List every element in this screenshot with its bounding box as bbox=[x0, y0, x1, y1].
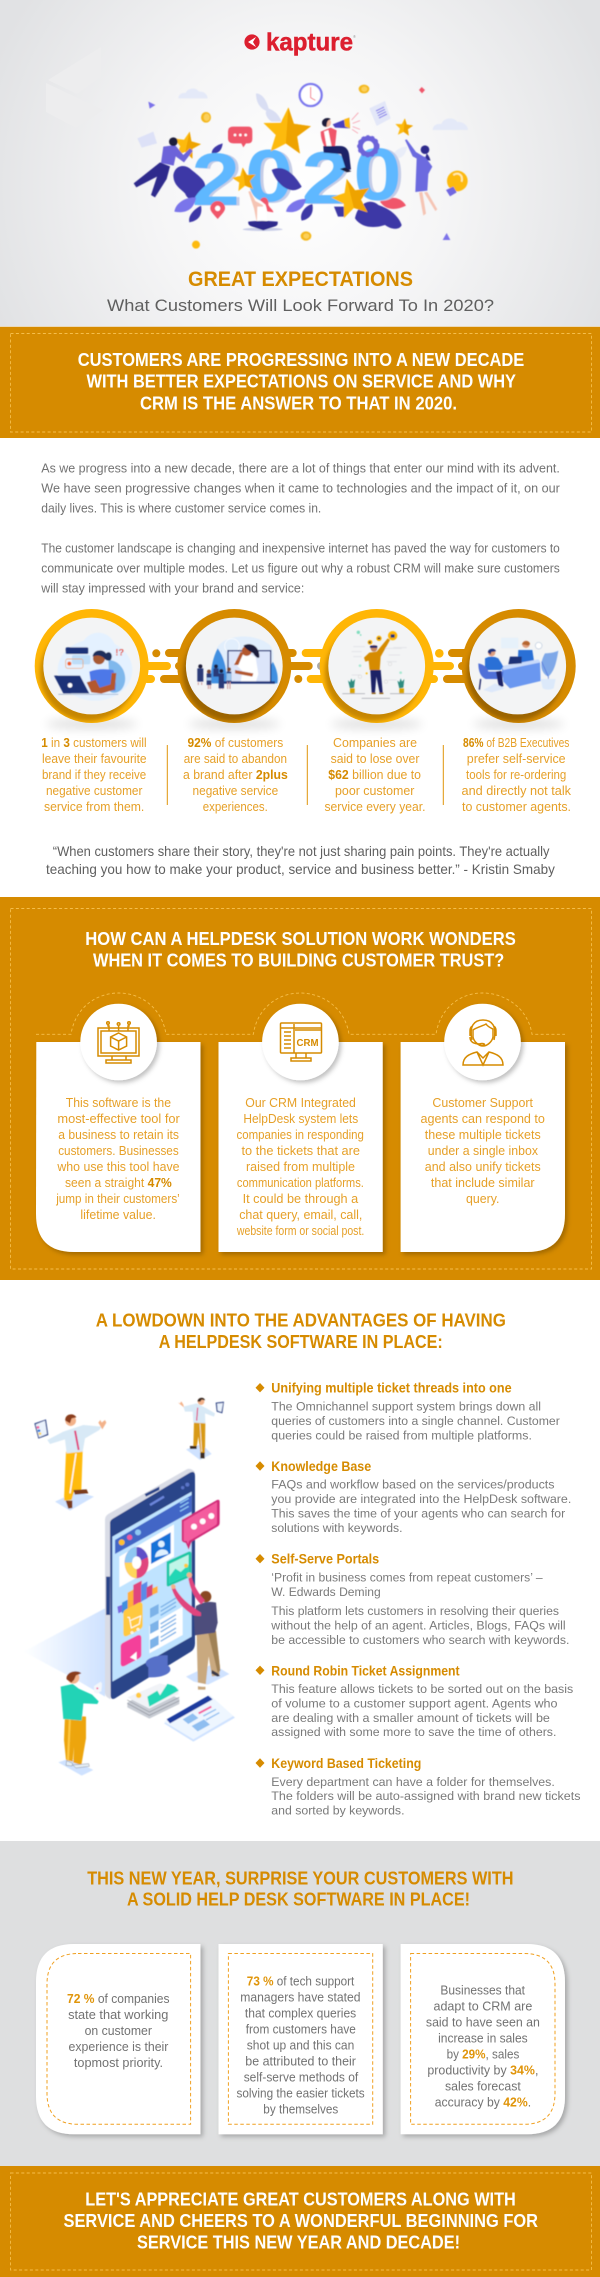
stat card 2: by themselves bbox=[263, 2103, 338, 2117]
stat text 3: Companies are bbox=[333, 736, 417, 750]
advantage 5: The folders will be auto-assigned with brand new tickets bbox=[271, 1789, 580, 1803]
stat text 3: service every year. bbox=[324, 800, 426, 814]
front leaves bbox=[174, 168, 402, 229]
stat card 3: accuracy by 42%. bbox=[435, 2096, 531, 2110]
stat text 2: 92% of customers bbox=[188, 736, 283, 750]
card 3 text: agents can respond to bbox=[420, 1112, 545, 1126]
card 3 text: query. bbox=[466, 1192, 499, 1206]
advantage 2: you provide are integrated into the HelpDesk software. bbox=[271, 1492, 571, 1506]
heading bbox=[85, 928, 516, 971]
light bulb bbox=[446, 171, 468, 196]
paper document bbox=[164, 1695, 235, 1742]
stat text 3: $62 billion due to bbox=[328, 768, 421, 782]
2020 digits: 0 bbox=[248, 135, 296, 218]
advantage 1: queries could be raised from multiple platforms. bbox=[271, 1428, 532, 1442]
stat circle 1 bbox=[35, 609, 149, 729]
image card bbox=[167, 1552, 191, 1586]
advantage 5: Keyword Based Ticketing bbox=[271, 1755, 421, 1771]
phone bbox=[105, 1469, 195, 1699]
closing banner bbox=[0, 2166, 600, 2277]
stat card 2: self-serve methods of bbox=[244, 2071, 359, 2085]
man with megaphone bbox=[321, 113, 360, 172]
card 3 text: Customer Support bbox=[432, 1096, 534, 1110]
intro paragraphs: will stay impressed with your brand and service: bbox=[40, 580, 304, 595]
advantage 5 bbox=[256, 1755, 580, 1817]
stat text 1: service from them. bbox=[44, 800, 144, 814]
card 2 bbox=[218, 1004, 383, 1252]
closing banner: SERVICE AND CHEERS TO A WONDERFUL BEGINNING FOR bbox=[64, 2210, 538, 2231]
heading: HOW CAN A HELPDESK SOLUTION WORK WONDERS bbox=[85, 928, 516, 949]
card 3 text: under a single inbox bbox=[428, 1144, 539, 1158]
card 2 text: raised from multiple bbox=[246, 1160, 355, 1174]
stat card 1: topmost priority. bbox=[74, 2056, 163, 2070]
card 1 text: who use this tool have bbox=[56, 1160, 180, 1174]
2020 digits: 2 bbox=[305, 137, 353, 220]
stat circle 4 bbox=[462, 609, 576, 729]
man with tablet right bbox=[178, 1398, 224, 1460]
advantage 4: Round Robin Ticket Assignment bbox=[271, 1662, 460, 1678]
heading: WHEN IT COMES TO BUILDING CUSTOMER TRUST? bbox=[93, 950, 504, 971]
man with phone bbox=[58, 1671, 102, 1776]
2020 digits: 2 bbox=[302, 136, 350, 219]
card 2 text: to the tickets that are bbox=[242, 1144, 360, 1158]
stat text 4: prefer self-service bbox=[467, 752, 566, 766]
advantage 3 bbox=[256, 1551, 569, 1647]
stat card 3: said to have seen an bbox=[426, 2016, 540, 2030]
advantage 5: and sorted by keywords. bbox=[271, 1803, 404, 1817]
advantage 2: solutions with keywords. bbox=[271, 1521, 402, 1535]
card 2 text bbox=[236, 1096, 364, 1238]
card 3 text: that include similar bbox=[431, 1176, 535, 1190]
chat bubble bbox=[228, 127, 252, 147]
card 2 text: HelpDesk system lets bbox=[243, 1112, 358, 1126]
icon: CRM monitor: CRM bbox=[296, 1038, 318, 1049]
watermark logo shape bbox=[46, 47, 103, 128]
card 2 text: It could be through a bbox=[243, 1192, 358, 1206]
subtitle: What Customers Will Look Forward To In 2020? bbox=[107, 296, 494, 315]
quote bbox=[46, 843, 555, 877]
hero illustration: 2020 bbox=[134, 84, 468, 249]
2020 digits: 0 bbox=[356, 134, 405, 217]
stat card 2: solving the easier tickets bbox=[236, 2087, 365, 2101]
stat card 2: managers have stated bbox=[240, 1991, 361, 2005]
card 3 text bbox=[420, 1096, 545, 1206]
stat card 2: from customers have bbox=[246, 2023, 356, 2037]
stat card 2: that complex queries bbox=[245, 2007, 356, 2021]
stat card 3: Businesses that bbox=[440, 1984, 526, 1998]
advantage 4: This feature allows tickets to be sorted out on the basis bbox=[271, 1682, 573, 1696]
advantage 1 bbox=[256, 1380, 560, 1442]
stat text 3 bbox=[324, 736, 426, 814]
intro paragraphs: daily lives. This is where customer service comes in. bbox=[41, 500, 321, 515]
card 3 text: and also unify tickets bbox=[425, 1160, 541, 1174]
stat text 2: are said to abandon bbox=[184, 752, 287, 766]
stat text 4: 86% of B2B Executives bbox=[463, 736, 569, 750]
shopping tile bbox=[123, 1602, 143, 1636]
illustration: people around phone bbox=[23, 1398, 235, 1776]
advantages heading: A HELPDESK SOFTWARE IN PLACE: bbox=[159, 1331, 443, 1352]
advantage 2: Knowledge Base bbox=[271, 1458, 371, 1474]
intro paragraphs: As we progress into a new decade, there are a lot of things that enter our mind with its advent. bbox=[41, 460, 560, 475]
quote: “When customers share their story, they're not just sharing pain points. They're actually bbox=[53, 843, 550, 859]
advantage 2: This saves the time of your agents who can search for bbox=[271, 1506, 565, 1520]
illustration: stressed agent and crowd bbox=[197, 637, 278, 689]
advantage 3: be accessible to customers who search with keywords. bbox=[271, 1633, 569, 1647]
kapture logo: ® bbox=[353, 34, 356, 39]
advantage 4: are dealing with a smaller amount of tickets will be bbox=[271, 1711, 550, 1725]
stat card 3: productivity by 34%, bbox=[427, 2064, 538, 2078]
advantage 3: Self-Serve Portals bbox=[271, 1551, 379, 1567]
advantage 3: without the help of an agent. Articles, Blogs, FAQs will bbox=[270, 1618, 566, 1632]
man with tablet left bbox=[34, 1414, 106, 1511]
stars bbox=[171, 106, 414, 220]
2020 digits: 2 bbox=[195, 139, 243, 222]
clock bbox=[300, 84, 322, 106]
intro banner bbox=[0, 326, 600, 438]
stat card 1: experience is their bbox=[68, 2040, 168, 2054]
2020 digits: 0 bbox=[245, 135, 293, 218]
stat card 1 bbox=[36, 1944, 200, 2134]
stat card 2: be attributed to their bbox=[245, 2055, 356, 2069]
stat circle 3 bbox=[320, 609, 434, 729]
advantage 2 bbox=[256, 1458, 571, 1535]
stat text 1: brand if they receive bbox=[42, 768, 146, 782]
photo stack bbox=[127, 1683, 179, 1719]
2020 digits: 0 bbox=[353, 133, 402, 216]
stat text 2: experiences. bbox=[203, 800, 268, 814]
card 3 text: these multiple tickets bbox=[425, 1128, 541, 1142]
kapture logo: kapture bbox=[266, 28, 353, 56]
advantage 2: FAQs and workflow based on the services/products bbox=[271, 1477, 554, 1491]
stat card 2: 73 % of tech support bbox=[247, 1975, 355, 1989]
card 2 text: website form or social post. bbox=[236, 1224, 364, 1238]
icon: CRM monitor bbox=[280, 1023, 322, 1061]
heading: THIS NEW YEAR, SURPRISE YOUR CUSTOMERS WITH bbox=[87, 1867, 513, 1888]
stat text 3: poor customer bbox=[335, 784, 414, 798]
stat card 1: 72 % of companies bbox=[67, 1992, 170, 2006]
chat bubble bbox=[182, 1500, 220, 1550]
back leaves bbox=[173, 93, 407, 209]
advantage 4: of volume to a customer support agent. Agents who bbox=[271, 1696, 558, 1710]
stat text 2: negative service bbox=[192, 784, 278, 798]
header panel bbox=[0, 0, 600, 327]
advantage 3: W. Edwards Deming bbox=[271, 1585, 381, 1599]
intro banner: CRM IS THE ANSWER TO THAT IN 2020. bbox=[140, 392, 457, 413]
card 3 bbox=[401, 1004, 565, 1252]
intro paragraphs: We have seen progressive changes when it came to technologies and the impact of it, on our bbox=[41, 480, 560, 495]
stat card 1: state that working bbox=[68, 2008, 168, 2022]
advantage 4 bbox=[256, 1662, 573, 1739]
title: great expectations: GREAT EXPECTATIONS bbox=[188, 268, 413, 291]
stat card 3: by 29%, sales bbox=[447, 2048, 519, 2062]
card 1 text: seen a straight 47% bbox=[65, 1176, 172, 1190]
card 2 text: communication platforms. bbox=[237, 1176, 364, 1190]
stat card 3: adapt to CRM are bbox=[434, 2000, 532, 2014]
card 1 text: This software is the bbox=[66, 1096, 171, 1110]
connector bars between circles bbox=[147, 649, 490, 683]
card 1 text: jump in their customers’ bbox=[55, 1192, 180, 1206]
quote: teaching you how to make your product, service and business better.” - Kristin Smaby bbox=[46, 861, 555, 877]
card 2 text: Our CRM Integrated bbox=[245, 1096, 356, 1110]
bars bbox=[117, 1581, 158, 1613]
advantages heading bbox=[96, 1310, 506, 1352]
stat card 3: sales forecast bbox=[445, 2080, 521, 2094]
stat text 2 bbox=[183, 736, 288, 814]
card 1 text: lifetime value. bbox=[80, 1208, 156, 1222]
card 2 text: companies in responding bbox=[236, 1128, 364, 1142]
stat text 4 bbox=[462, 736, 572, 814]
icon: monitor with cube bbox=[98, 1022, 139, 1063]
advantage 3: ‘Profit in business comes from repeat customers’ – bbox=[271, 1570, 543, 1584]
closing banner: LET'S APPRECIATE GREAT CUSTOMERS ALONG WITH bbox=[85, 2188, 516, 2209]
card 1 text: customers. Businesses bbox=[58, 1144, 179, 1158]
2020 digits bbox=[192, 133, 405, 222]
stat card 1: on customer bbox=[85, 2024, 152, 2038]
card 1 text: a business to retain its bbox=[58, 1128, 179, 1142]
stat circle 2 bbox=[177, 609, 291, 729]
stat text 1: leave their favourite bbox=[42, 752, 147, 766]
stat card 3: increase in sales bbox=[438, 2032, 528, 2046]
card 1 bbox=[36, 1004, 200, 1252]
stat text 4: tools for re-ordering bbox=[466, 768, 566, 782]
card 2 text: chat query, email, call, bbox=[239, 1208, 362, 1222]
advantage 3: This platform lets customers in resolving their queries bbox=[271, 1604, 559, 1618]
heading: A SOLID HELP DESK SOFTWARE IN PLACE! bbox=[127, 1889, 470, 1910]
advantage 5: Every department can have a folder for themselves. bbox=[271, 1775, 555, 1789]
advantage 4: assigned with some more to save the time of others. bbox=[271, 1725, 556, 1739]
media tile bbox=[121, 1635, 141, 1666]
illustration: customer at service desk bbox=[478, 638, 558, 692]
person holding star bbox=[134, 137, 193, 197]
helpdesk panel bbox=[0, 897, 600, 1280]
intro paragraphs: communicate over multiple modes. Let us figure out why a robust CRM will make sure customers bbox=[41, 560, 560, 575]
intro banner: CUSTOMERS ARE PROGRESSING INTO A NEW DECADE bbox=[78, 349, 524, 370]
stat text 4: and directly not talk bbox=[462, 784, 572, 798]
advantage 1: queries of customers into a single channel. Customer bbox=[271, 1414, 560, 1428]
card 1 text: most-effective tool for bbox=[57, 1112, 180, 1126]
stat text 4: to customer agents. bbox=[462, 800, 571, 814]
stat text 1: 1 in 3 customers will bbox=[41, 736, 147, 750]
advantages heading: A LOWDOWN INTO THE ADVANTAGES OF HAVING bbox=[96, 1310, 506, 1331]
icon: support agent bbox=[463, 1020, 503, 1065]
gear bbox=[358, 136, 378, 156]
stat text 1: negative customer bbox=[46, 784, 142, 798]
stat text 2: a brand after 2plus bbox=[183, 768, 288, 782]
closing banner: SERVICE THIS NEW YEAR AND DECADE! bbox=[137, 2232, 460, 2253]
woman reaching up bbox=[405, 139, 437, 216]
new year panel bbox=[0, 1841, 600, 2166]
stat card 3 bbox=[401, 1944, 565, 2134]
stat card 2: shot up and this can bbox=[247, 2039, 354, 2053]
stat text 1 bbox=[41, 736, 147, 814]
stat text 3: said to lose over bbox=[331, 752, 419, 766]
advantage 1: Unifying multiple ticket threads into one bbox=[271, 1380, 512, 1396]
intro paragraphs: The customer landscape is changing and inexpensive internet has paved the way for customers to bbox=[41, 540, 560, 555]
illustration: person with thumbs-down ratings bbox=[342, 631, 413, 698]
advantage 1: The Omnichannel support system brings down all bbox=[271, 1399, 541, 1413]
card 1 text bbox=[55, 1096, 180, 1222]
yoga woman bbox=[243, 191, 283, 231]
heading bbox=[87, 1867, 513, 1910]
map pin bbox=[210, 201, 225, 219]
intro paragraphs bbox=[40, 460, 560, 595]
stat card 2 bbox=[218, 1944, 383, 2134]
2020 digits: 2 bbox=[192, 138, 240, 221]
document bbox=[369, 101, 391, 126]
intro banner: WITH BETTER EXPECTATIONS ON SERVICE AND WHY bbox=[86, 371, 517, 392]
illustration: support agent with laptop: !? bbox=[115, 648, 124, 658]
man touching screen bbox=[171, 1572, 229, 1690]
